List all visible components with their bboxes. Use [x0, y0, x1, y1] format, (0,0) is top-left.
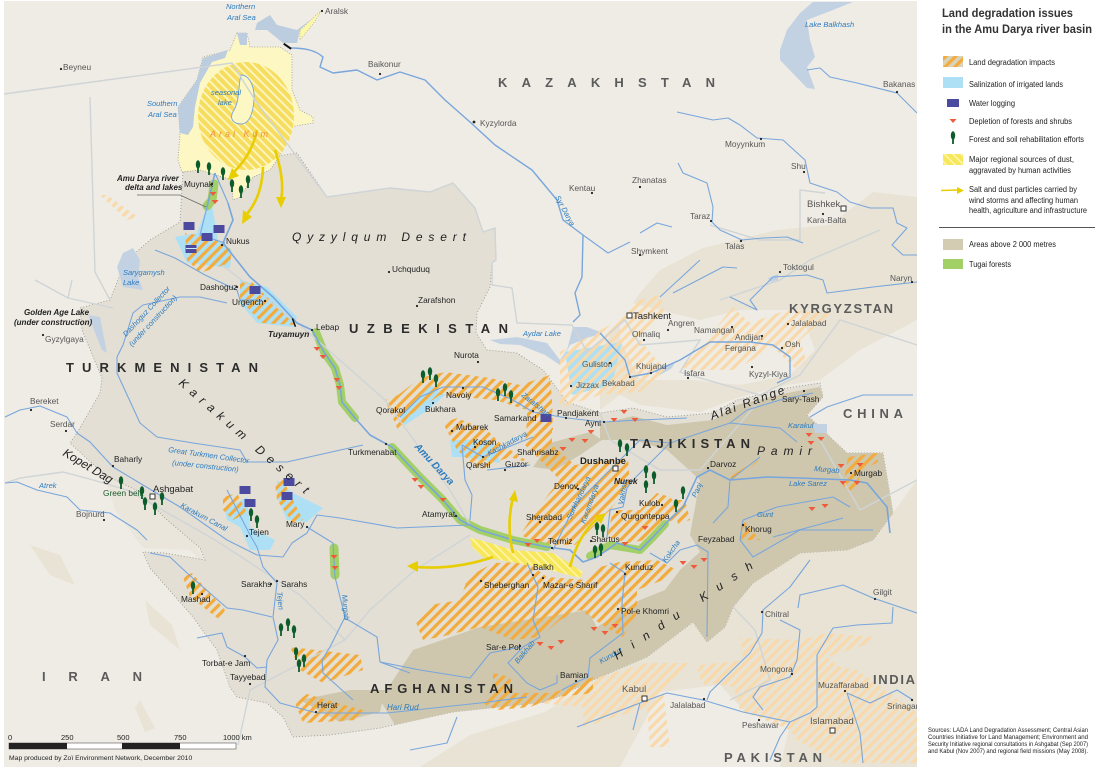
scale bar: 500 — [117, 733, 130, 742]
scale bar: 0 — [8, 733, 12, 742]
place names: Shu — [791, 161, 806, 171]
place names: Kabul — [622, 684, 646, 695]
physical feature names: Alai Range — [707, 383, 787, 423]
place names: Tuyamuyn — [268, 329, 309, 339]
water and river names: Dashoguz Collector — [121, 284, 172, 338]
place names: Beyneu — [63, 62, 92, 72]
place names: Kentau — [569, 183, 596, 193]
water logging markers — [184, 222, 552, 507]
water and river names: (under construction) — [172, 458, 240, 474]
scale bar: 750 — [174, 733, 187, 742]
water and river names: Zarafshan — [519, 390, 552, 418]
murgab river — [307, 527, 410, 700]
physical feature names: Qyzylqum Desert — [292, 230, 467, 244]
place names: Mazar-e Sharif — [543, 580, 598, 590]
city point markers — [30, 10, 913, 721]
place names: Fergana — [725, 343, 756, 353]
place names: Green belt — [103, 488, 142, 498]
map credit: Map produced by Zoï Environment Network, December 2010 — [9, 755, 192, 762]
place names: Olmaliq — [632, 329, 661, 339]
place names: Bukhara — [425, 404, 456, 414]
place names: Koson — [473, 437, 497, 447]
place names: Angren — [668, 318, 695, 328]
water and river names: Northern — [226, 2, 255, 11]
water and river names: Karakul — [788, 421, 814, 430]
international borders — [4, 63, 917, 745]
water and river names: Surkhandarya — [565, 475, 593, 521]
sources note: and Kabul (Nov 2007) and regional field missions (May 2008). — [928, 748, 1088, 755]
amu darya — [207, 173, 890, 562]
bold annotations: (under construction) — [14, 318, 93, 327]
major dust source near Termez — [470, 538, 583, 578]
place names: Mongora — [760, 664, 793, 674]
country names: INDIA — [873, 672, 916, 687]
syr darya — [290, 48, 790, 383]
place names: Gilgit — [873, 587, 893, 597]
legend: forest rehabilitation: Forest and soil rehabilitation efforts — [969, 135, 1084, 144]
legend: land degradation impacts — [943, 56, 1055, 67]
place names: Baikonur — [368, 59, 401, 69]
water and river names: Aral Sea — [226, 13, 256, 22]
place names: Naryn — [890, 273, 913, 283]
water and river names: (under construction) — [127, 293, 179, 348]
place names: Tashkent — [633, 311, 671, 322]
bold annotations: Golden Age Lake — [24, 308, 90, 317]
country names: CHINA — [843, 406, 904, 421]
place names: Nurota — [454, 350, 479, 360]
place names: Ayni — [585, 418, 601, 428]
water and river names: Atrek — [38, 481, 58, 490]
place names: Guzor — [505, 459, 528, 469]
arrow — [232, 130, 257, 174]
place names: Mary — [286, 519, 305, 529]
water and river names: seasonal — [211, 88, 241, 97]
physical feature names — [60, 129, 813, 662]
bold annotations: Amu Darya river — [116, 174, 180, 183]
place names: Khorug — [745, 524, 772, 534]
country names: KAZAKHSTAN — [498, 75, 715, 90]
place names: Tayyebad — [230, 672, 266, 682]
place names: Baharly — [114, 454, 143, 464]
sources note: Sources: LADA Land Degradation Assessment; Central Asian — [928, 727, 1089, 734]
place names: Aralsk — [325, 6, 349, 16]
place names: Bakanas — [883, 79, 915, 89]
place names: Peshawar — [742, 720, 779, 730]
legend title — [942, 6, 1092, 36]
water and river names: Vakhsh — [616, 479, 629, 505]
place names: Tejen — [249, 527, 269, 537]
place names: Pol-e Khomri — [621, 606, 669, 616]
legend — [939, 56, 1095, 269]
place names: Murgab — [854, 468, 883, 478]
place names: Atamyrat — [422, 509, 456, 519]
place names: Sarakhs — [241, 579, 271, 589]
water and river names: Lake Sarez — [789, 479, 827, 488]
legend: tugai forests — [943, 259, 1011, 269]
place names: Urgench — [232, 297, 264, 307]
place names: Sary-Tash — [782, 394, 820, 404]
place names: Muynak — [184, 179, 214, 189]
legend: dust arrow: wind storms and affecting human — [968, 196, 1078, 205]
place names: Sherabad — [526, 512, 562, 522]
scale bar: 1000 km — [223, 733, 252, 742]
water and river names: Great Turkmen Collector — [168, 445, 250, 465]
place names: Chitral — [765, 609, 789, 619]
country names: UZBEKISTAN — [349, 321, 508, 336]
place names: Shymkent — [631, 246, 669, 256]
legend: dust sources: Major regional sources of dust, — [969, 155, 1074, 164]
place names: Denov — [554, 481, 579, 491]
legend: land degradation impacts: Land degradation impacts — [969, 58, 1055, 67]
place names: Guliston — [582, 359, 613, 369]
legend: water logging — [947, 99, 1015, 108]
place names: Dushanbe — [580, 456, 626, 467]
land degradation hatching, outside basin — [100, 195, 917, 763]
place names: Nurek — [614, 476, 638, 486]
place names: Shartus — [591, 534, 620, 544]
bold annotations — [14, 174, 183, 327]
place names: Sar-e Pol — [486, 642, 521, 652]
place names: Qarshi — [466, 460, 491, 470]
place names: Kara-Balta — [807, 215, 847, 225]
country names — [42, 75, 916, 765]
water and river names: Murgab — [814, 464, 840, 475]
place names: Torbat-e Jam — [202, 658, 251, 668]
place names: Bishkek — [807, 199, 841, 210]
lakes — [88, 2, 853, 433]
water and river names: Karamdarya — [578, 483, 601, 525]
place names: Kyzyl-Kiya — [749, 369, 788, 379]
bold annotations: delta and lakes — [125, 183, 183, 192]
place names: Moyynkum — [725, 139, 765, 149]
water and river names: Amu Darya — [411, 441, 456, 488]
legend: depletion of forests: Depletion of forests and shrubs — [969, 117, 1072, 126]
basin mountains above 2000 m — [300, 387, 893, 725]
water and river names: Balkhab — [513, 639, 537, 665]
place names: Termiz — [548, 536, 572, 546]
place names: Shahrisabz — [517, 447, 559, 457]
water and river names: Lake — [123, 278, 139, 287]
water and river names: Murgab — [340, 594, 351, 621]
physical feature names: Pamir — [757, 444, 813, 458]
depletion of forests markers — [210, 192, 864, 650]
scale bar: 250 — [61, 733, 74, 742]
scale bar — [8, 733, 252, 749]
country names: TAJIKISTAN — [630, 436, 750, 451]
place names: Uchquduq — [392, 264, 430, 274]
place names: Turkmenabat — [348, 447, 397, 457]
water and river names: Kashkadarya — [486, 429, 529, 458]
place names: Osh — [785, 339, 801, 349]
place names: Muzaffarabad — [818, 680, 869, 690]
legend: tugai forests: Tugai forests — [969, 260, 1011, 269]
water and river names: Tejen — [275, 591, 286, 610]
land degradation hatching, in basin — [183, 233, 878, 723]
legend: forest rehabilitation — [951, 131, 1084, 144]
place names: Bereket — [30, 396, 59, 406]
place names: Bamian — [560, 670, 589, 680]
physical feature names: Karakum Desert — [176, 376, 313, 497]
karakum canal — [5, 406, 470, 557]
place names: Gyzylgaya — [45, 334, 84, 344]
place names: Sarahs — [281, 579, 307, 589]
place names: Srinagar — [887, 701, 919, 711]
place names: Kyzylorda — [480, 118, 517, 128]
water and river names: Gunt — [757, 510, 774, 519]
place names: Herat — [317, 700, 338, 710]
place names: Qurgonteppa — [621, 511, 670, 521]
legend: water logging: Water logging — [969, 99, 1015, 108]
place names: Bojnurd — [76, 509, 105, 519]
legend: dust sources: aggravated by human activities — [969, 166, 1071, 175]
legend: dust arrow: health, agriculture and infrastructure — [969, 206, 1088, 215]
place names: Toktogul — [783, 262, 814, 272]
place names — [30, 6, 919, 730]
physical feature names: Aral Kum — [209, 129, 268, 139]
country names: KYRGYZSTAN — [789, 301, 893, 316]
legend: areas above 2000 m — [943, 239, 1056, 250]
place names: Lebap — [316, 322, 339, 332]
place names: Dashoguz — [200, 282, 237, 292]
sources note — [928, 727, 1089, 755]
place names: Jalalabad — [791, 318, 827, 328]
place names: Qorakol — [376, 405, 405, 415]
basin area — [70, 153, 893, 737]
water and river names: Hari Rud — [387, 703, 419, 712]
water and river names: Syr Darya — [553, 194, 577, 227]
place names: Zarafshon — [418, 295, 456, 305]
place names: Bekabad — [602, 378, 635, 388]
tugai forests — [207, 184, 665, 575]
rivers — [5, 48, 917, 763]
physical feature names: Kopet Dag — [60, 446, 116, 487]
southern tributaries — [380, 563, 790, 760]
place names: Khujand — [636, 361, 667, 371]
country names: AFGHANISTAN — [370, 681, 513, 696]
legend: dust sources — [943, 154, 1074, 175]
water and river names: Karakum Canal — [179, 501, 229, 533]
sources note: Countries Initiative for Land Management; Environment and — [928, 734, 1089, 741]
place names: Zhanatas — [632, 175, 667, 185]
sources note: Security Initiative regional consultations in Ashgabat (Sep 2007) — [928, 741, 1088, 748]
place names: Mashad — [181, 594, 211, 604]
legend: salinization: Salinization of irrigated lands — [969, 80, 1063, 89]
aral kum desert — [178, 10, 322, 200]
white legend panel — [917, 0, 1103, 772]
place names: Samarkand — [494, 413, 537, 423]
place names: Pandjakent — [557, 408, 599, 418]
water and river names: Kokcha — [660, 538, 682, 564]
water and river names: lake — [218, 98, 232, 107]
outer mountains — [30, 192, 917, 767]
place names: Isfara — [684, 368, 705, 378]
legend title: in the Amu Darya river basin — [942, 22, 1092, 36]
place names: Navoiy — [446, 390, 472, 400]
place names: Namangan — [694, 325, 735, 335]
place names: Serdar — [50, 419, 75, 429]
country names: PAKISTAN — [724, 750, 822, 765]
lake balkhash — [780, 2, 853, 89]
water and river names: Sarygamysh — [123, 268, 165, 277]
zeravshan — [400, 387, 687, 422]
legend title: Land degradation issues — [942, 6, 1073, 20]
place names: Talas — [725, 241, 744, 251]
water and river names — [38, 2, 854, 712]
forest rehabilitation tree markers — [119, 160, 685, 672]
water and river names: Lake Balkhash — [805, 20, 854, 29]
place names: Nukus — [226, 236, 250, 246]
legend: dust arrow — [941, 185, 1088, 215]
place names: Mubarek — [456, 422, 489, 432]
water and river names: Aydar Lake — [522, 329, 561, 338]
water and river names: Aral Sea — [147, 110, 177, 119]
water and river names: Kunduz — [598, 645, 624, 666]
place names: Kulob — [639, 498, 661, 508]
place names: Islamabad — [810, 716, 854, 727]
place names: Balkh — [533, 562, 554, 572]
place names: Sheberghan — [484, 580, 530, 590]
legend: areas above 2000 m: Areas above 2 000 metres — [969, 240, 1056, 249]
place names: Jizzax — [576, 380, 600, 390]
physical feature names: Hindu Kush — [611, 558, 756, 662]
wind-blown dust arrows — [228, 130, 606, 572]
legend: dust arrow: Salt and dust particles carried by — [969, 185, 1077, 194]
country names: TURKMENISTAN — [66, 360, 258, 375]
water and river names: Southern — [147, 99, 177, 108]
place names: Jalalabad — [670, 700, 706, 710]
water and river names: Panj — [690, 481, 704, 499]
place names: Darvoz — [710, 459, 736, 469]
legend: salinization — [943, 77, 1063, 89]
tejen river — [227, 490, 527, 713]
capital city markers — [150, 206, 846, 733]
country names: IRAN — [42, 669, 142, 684]
place names: Taraz — [690, 211, 710, 221]
salinization of irrigated lands — [175, 205, 622, 550]
place names: Andijan — [735, 332, 763, 342]
place names: Kunduz — [625, 562, 653, 572]
place names: Ashgabat — [153, 484, 194, 495]
place names: Feyzabad — [698, 534, 735, 544]
